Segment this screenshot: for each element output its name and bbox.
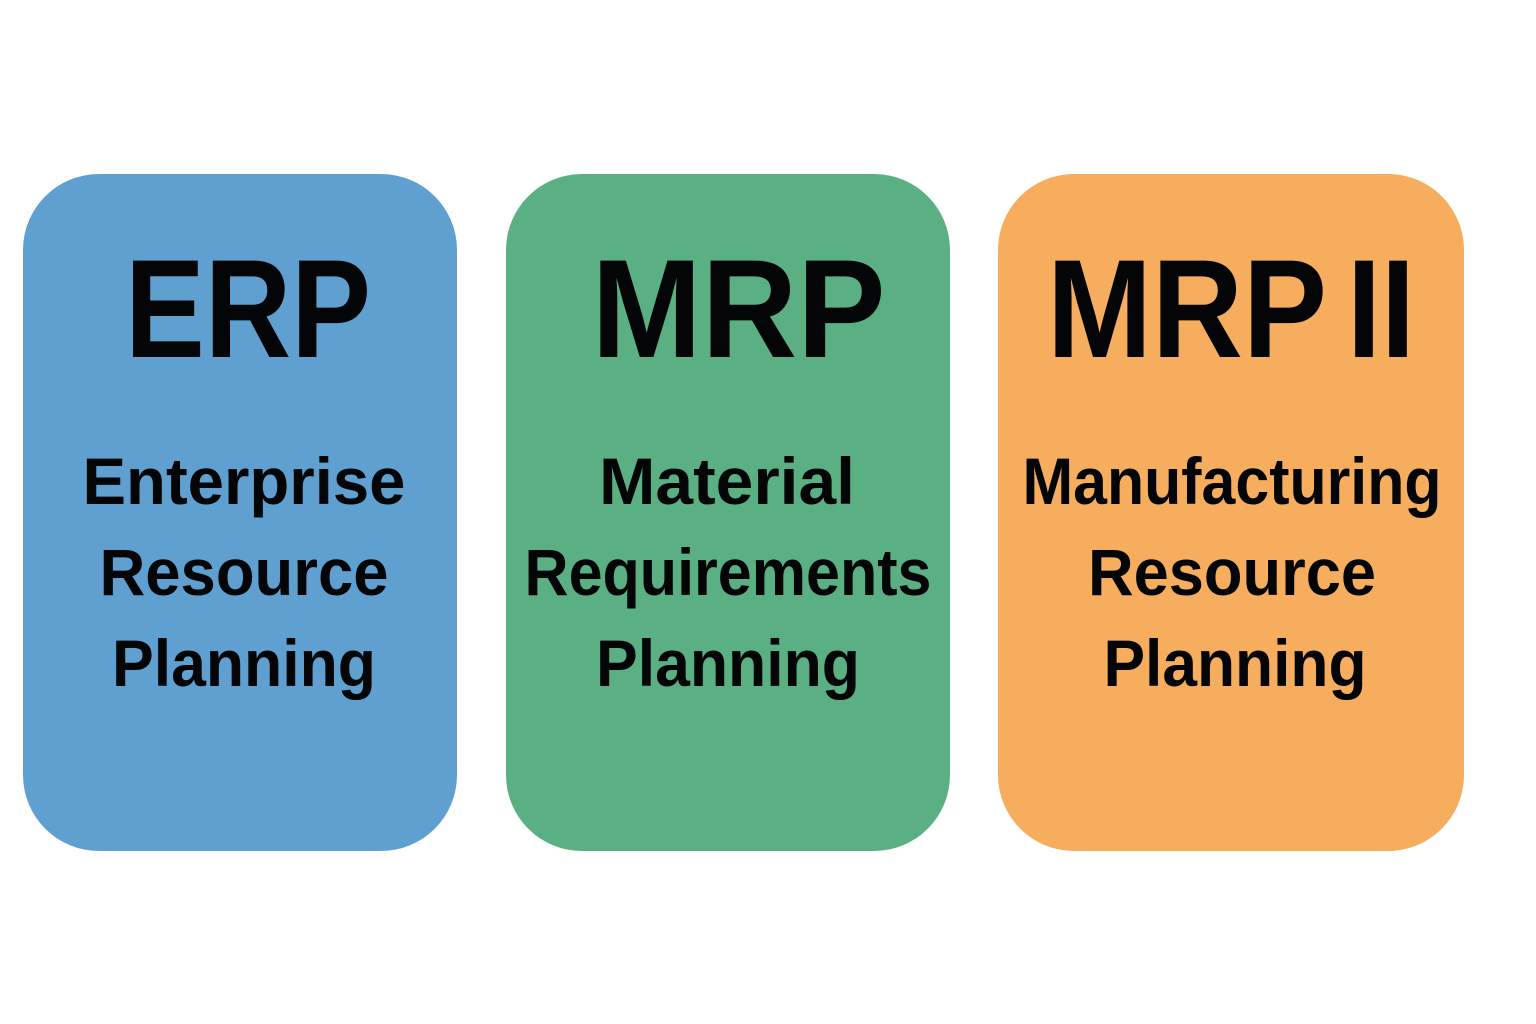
text: Manufacturing Resource Planning xyxy=(1022,444,1442,700)
panel: MRP xyxy=(506,174,950,851)
text: Manufacturing Resource Planning: Planning xyxy=(1104,626,1366,700)
text: Material Requirements Planning: Planning xyxy=(596,626,860,700)
text: Material Requirements Planning: Requirements xyxy=(524,535,932,609)
text: Manufacturing Resource Planning: Resource xyxy=(1088,535,1376,609)
card background: ERP xyxy=(23,174,457,851)
text: Material Requirements Planning xyxy=(524,444,932,700)
card background: MRP II xyxy=(998,174,1464,851)
heading: MRP: MRP xyxy=(592,230,886,387)
panel: MRP II xyxy=(998,174,1464,851)
panel: ERP xyxy=(23,174,457,851)
text: Material Requirements Planning: Material xyxy=(599,444,855,518)
text: Enterprise Resource Planning xyxy=(82,444,406,700)
text: Enterprise Resource Planning: Planning xyxy=(112,626,376,700)
heading: ERP: ERP xyxy=(125,230,371,387)
text: Enterprise Resource Planning: Enterprise xyxy=(82,444,406,518)
card background: MRP xyxy=(506,174,950,851)
text: Manufacturing Resource Planning: Manufacturing xyxy=(1022,444,1442,518)
text: Enterprise Resource Planning: Resource xyxy=(100,535,388,609)
heading: MRP II: II xyxy=(1347,230,1415,387)
heading: MRP II: MRP xyxy=(1047,230,1327,387)
